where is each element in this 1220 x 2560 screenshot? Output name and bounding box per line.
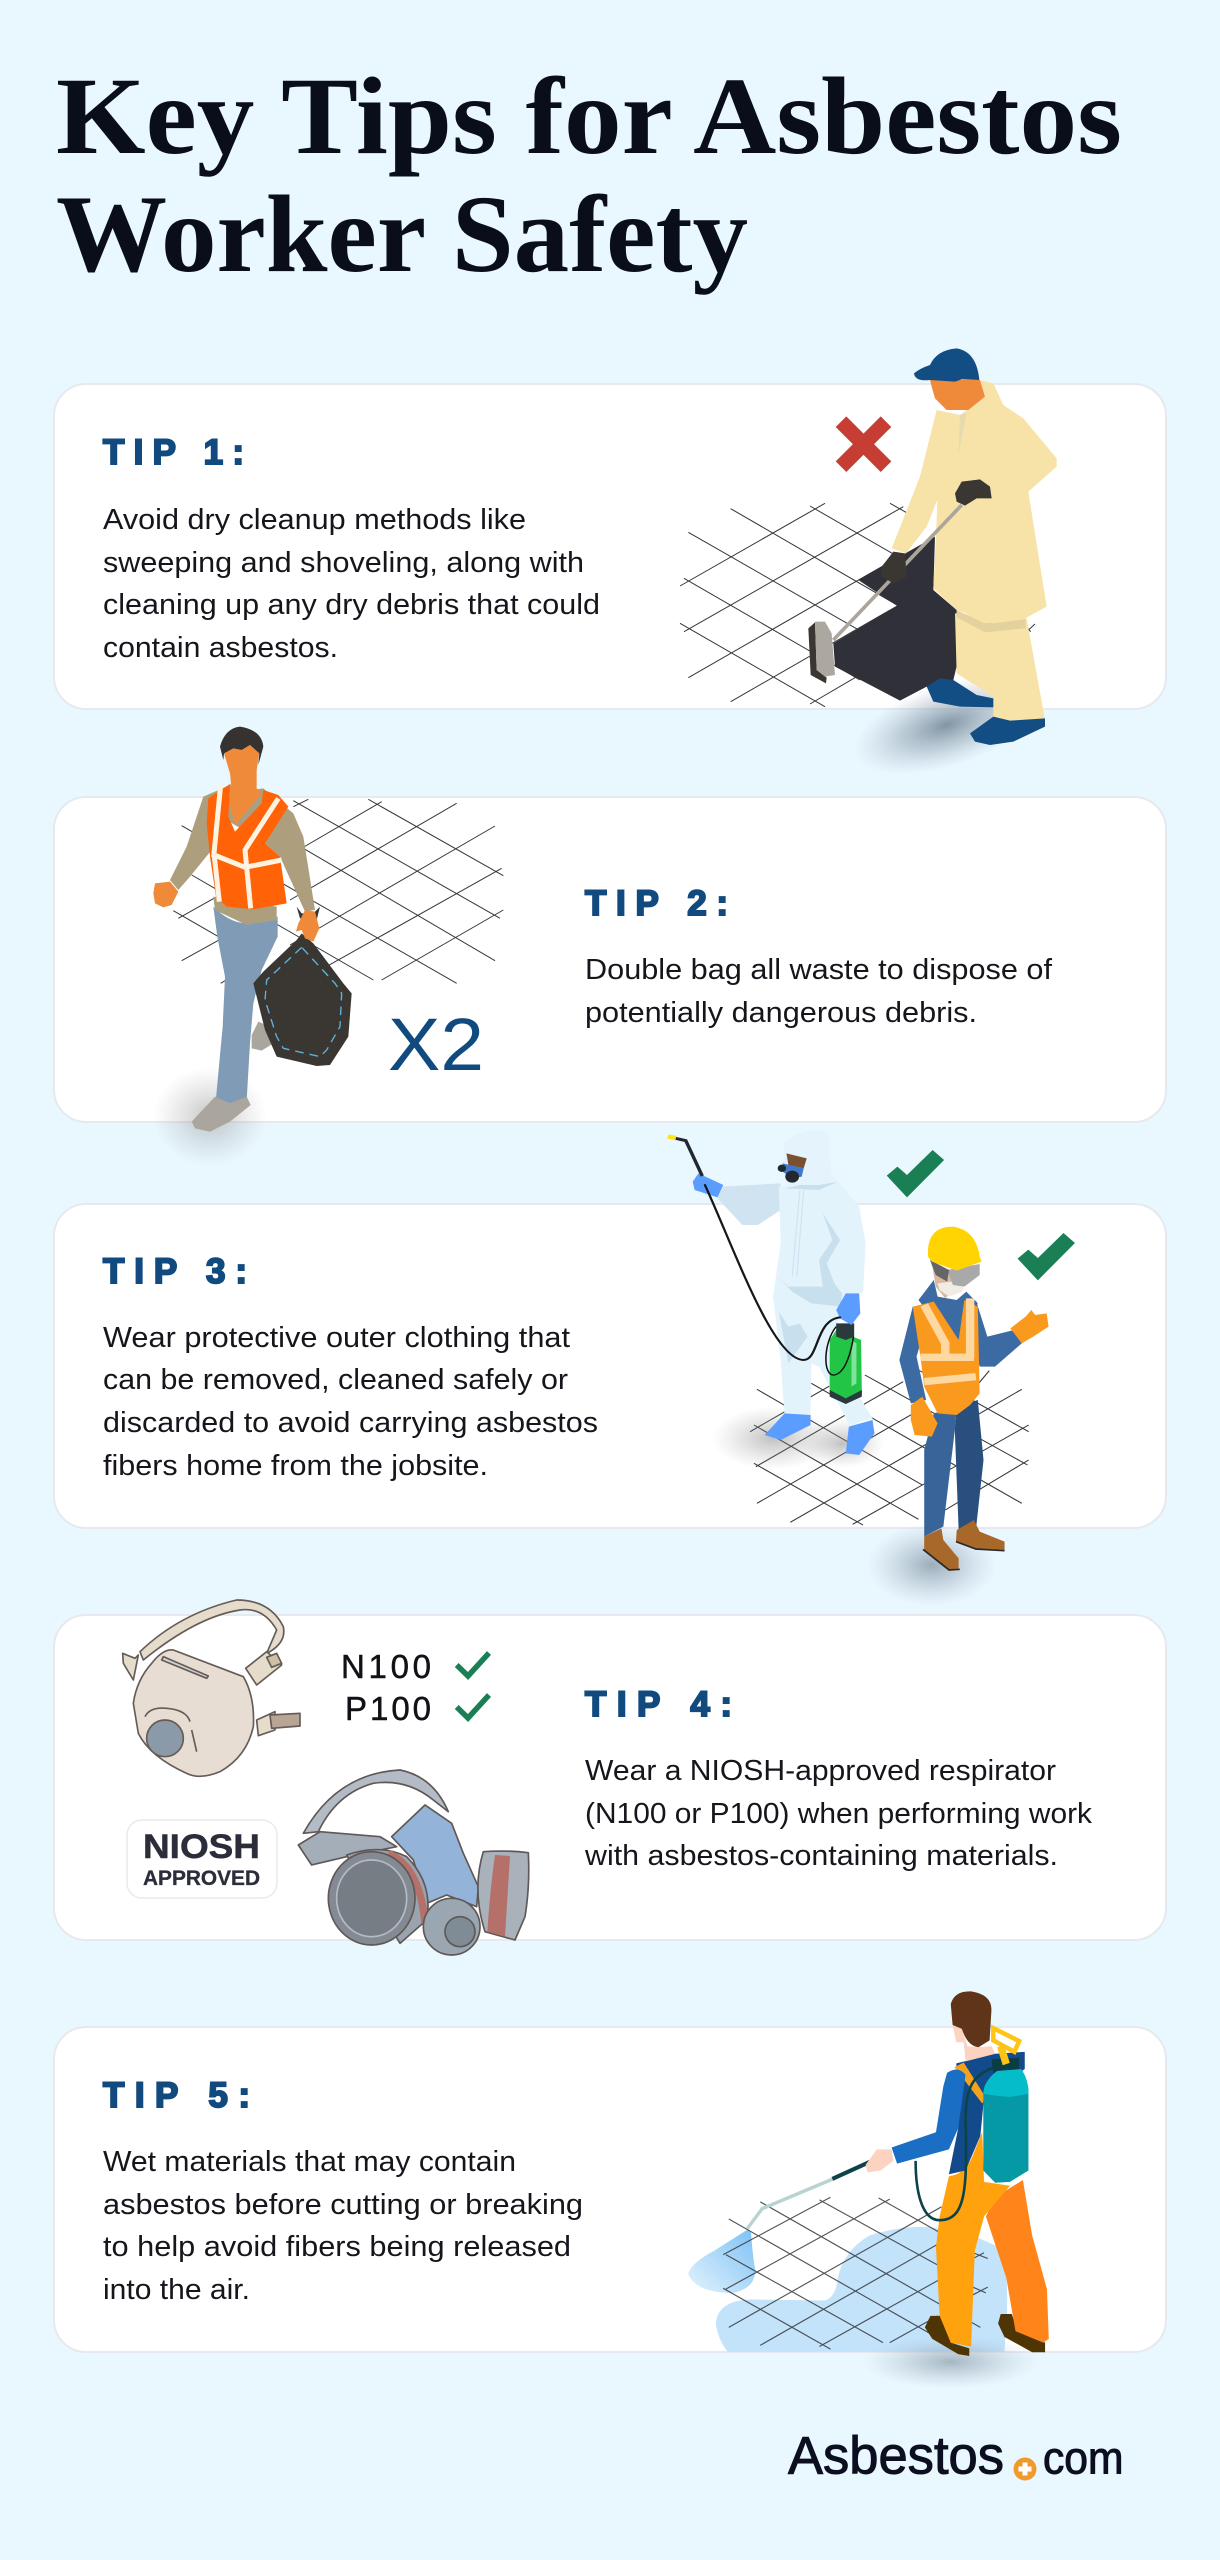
hazmat suit xyxy=(718,1183,781,1225)
cap xyxy=(914,348,979,382)
illustration: worker wetting materials xyxy=(688,1991,1049,2389)
badge: niosh approved: APPROVED xyxy=(143,1867,260,1890)
text: tip 5 body: Wet materials that may contain xyxy=(103,2146,516,2178)
yellow helmet xyxy=(928,1227,982,1271)
sprayer tank xyxy=(830,1330,862,1403)
text: tip 4 body xyxy=(584,1755,1093,1872)
logo: asbestos.com: com xyxy=(1043,2432,1124,2484)
text: tip 5 body xyxy=(103,2146,583,2306)
badge: niosh approved: NIOSH xyxy=(143,1828,260,1866)
illustration: half-face p100 respirator xyxy=(298,1770,529,1955)
icon: p100 check xyxy=(457,1695,489,1718)
text: tip 4 body: (N100 or P100) when performing work xyxy=(585,1798,1093,1830)
jeans xyxy=(213,907,278,1103)
labels: n100 and p100 xyxy=(341,1648,431,1727)
floor grid xyxy=(750,1370,1029,1525)
shadow xyxy=(862,2335,1040,2389)
floor grid xyxy=(173,799,503,983)
sweater xyxy=(213,897,277,925)
text: tip 4 body: Wear a NIOSH-approved respirator xyxy=(585,1755,1057,1787)
orange vest xyxy=(913,1300,980,1415)
logo: asbestos.com: Asbestos xyxy=(788,2426,1004,2486)
heading: tip 3: TIP 3: xyxy=(103,1252,247,1291)
face xyxy=(930,380,985,410)
debris pile xyxy=(833,537,959,701)
heading: tip 2: TIP 2: xyxy=(585,884,728,923)
shadow xyxy=(842,655,1051,794)
labels: n100 and p100: P100 xyxy=(345,1690,431,1727)
heading: tip 1: TIP 1: xyxy=(103,433,244,472)
text: tip 3 body: Wear protective outer clothing that xyxy=(103,1322,570,1354)
panel: tip 5 xyxy=(54,1991,1166,2389)
water puddle xyxy=(716,2227,1007,2352)
text: tip 1 body: cleaning up any dry debris that could xyxy=(103,589,600,621)
shadow xyxy=(153,1067,267,1167)
text: tip 1 body: Avoid dry cleanup methods like xyxy=(103,504,526,536)
spray wand and hose xyxy=(705,1185,840,1360)
icon: red x xyxy=(841,422,886,467)
worker in hard hat: arms xyxy=(899,1307,928,1403)
panel: tip 2 xyxy=(54,727,1166,1167)
trash bag xyxy=(253,907,352,1066)
icon: orange plus xyxy=(1014,2458,1036,2480)
text: tip 5 body: into the air. xyxy=(103,2274,250,2306)
hose xyxy=(916,2067,995,2220)
logo: asbestos.com xyxy=(788,2426,1124,2486)
text: tip 3 body: fibers home from the jobsite. xyxy=(103,1450,488,1482)
broom head xyxy=(808,622,827,683)
floor grid xyxy=(723,2197,988,2349)
gloves xyxy=(955,479,992,506)
respirator face xyxy=(786,1153,807,1168)
orange trousers xyxy=(986,2180,1049,2343)
icon: green check 1 xyxy=(887,1150,944,1197)
broom handle xyxy=(833,505,962,640)
icon: green check 2 xyxy=(1018,1233,1075,1280)
text: tip 5 body: to help avoid fibers being released xyxy=(103,2231,571,2263)
heading: tip 5: TIP 5: xyxy=(103,2076,250,2115)
heading: tip 4: TIP 4: xyxy=(585,1685,732,1724)
text: tip 5 body: asbestos before cutting or breaking xyxy=(103,2189,583,2221)
blue shirt xyxy=(949,2052,1025,2174)
boots xyxy=(925,2316,969,2356)
worker coveralls xyxy=(955,613,1045,722)
panel: tip 1 xyxy=(54,348,1166,794)
text: tip 4 body: with asbestos-containing materials. xyxy=(584,1840,1058,1872)
text: tip 3 body: can be removed, cleaned safely or xyxy=(103,1364,569,1396)
neck xyxy=(224,745,262,825)
blue gloves and boots xyxy=(693,1173,723,1197)
hands xyxy=(153,882,178,907)
title xyxy=(56,55,1122,295)
text: tip 2 body xyxy=(585,954,1052,1029)
yellow pump handle xyxy=(993,2028,1019,2052)
text: tip 3 body: discarded to avoid carrying asbestos xyxy=(103,1407,598,1439)
illustration: worker carrying bag xyxy=(153,727,503,1167)
panel: tip 3 xyxy=(54,1130,1166,1607)
title: Key Tips for Asbestos xyxy=(56,55,1122,177)
title: Worker Safety xyxy=(56,173,748,295)
head, mask and goggles xyxy=(932,1263,957,1298)
safety vest xyxy=(207,784,288,909)
panel: tip 4 xyxy=(54,1600,1166,1955)
water spray xyxy=(688,2230,755,2293)
text: tip 1 body: contain asbestos. xyxy=(103,632,338,664)
neck and head xyxy=(953,2025,995,2061)
backpack tank xyxy=(991,2058,1019,2079)
badge: niosh approved xyxy=(127,1820,277,1898)
icon: n100 check xyxy=(457,1653,489,1676)
label: x2: X2 xyxy=(388,1003,484,1086)
hand and wand xyxy=(747,2179,833,2229)
text: tip 1 body: sweeping and shoveling, along with xyxy=(103,547,584,579)
illustration: worker sweeping xyxy=(680,348,1057,794)
labels: n100 and p100: N100 xyxy=(341,1648,431,1685)
text: tip 1 body xyxy=(103,504,600,664)
floor grid xyxy=(680,503,1035,707)
orange gloves xyxy=(911,1397,938,1437)
hair xyxy=(220,727,263,765)
front shoe xyxy=(192,1097,251,1132)
illustration: disposable n100 mask xyxy=(123,1600,300,1776)
boots xyxy=(927,678,993,707)
trousers xyxy=(924,1407,957,1537)
text: tip 2 body: potentially dangerous debris. xyxy=(585,997,977,1029)
back shoe xyxy=(252,1022,273,1051)
text: tip 2 body: Double bag all waste to dispose of xyxy=(585,954,1052,986)
illustration: two workers in protective clothing xyxy=(668,1130,1075,1607)
text: tip 3 body xyxy=(103,1322,598,1482)
shadows xyxy=(712,1407,834,1470)
boots xyxy=(924,1528,959,1570)
